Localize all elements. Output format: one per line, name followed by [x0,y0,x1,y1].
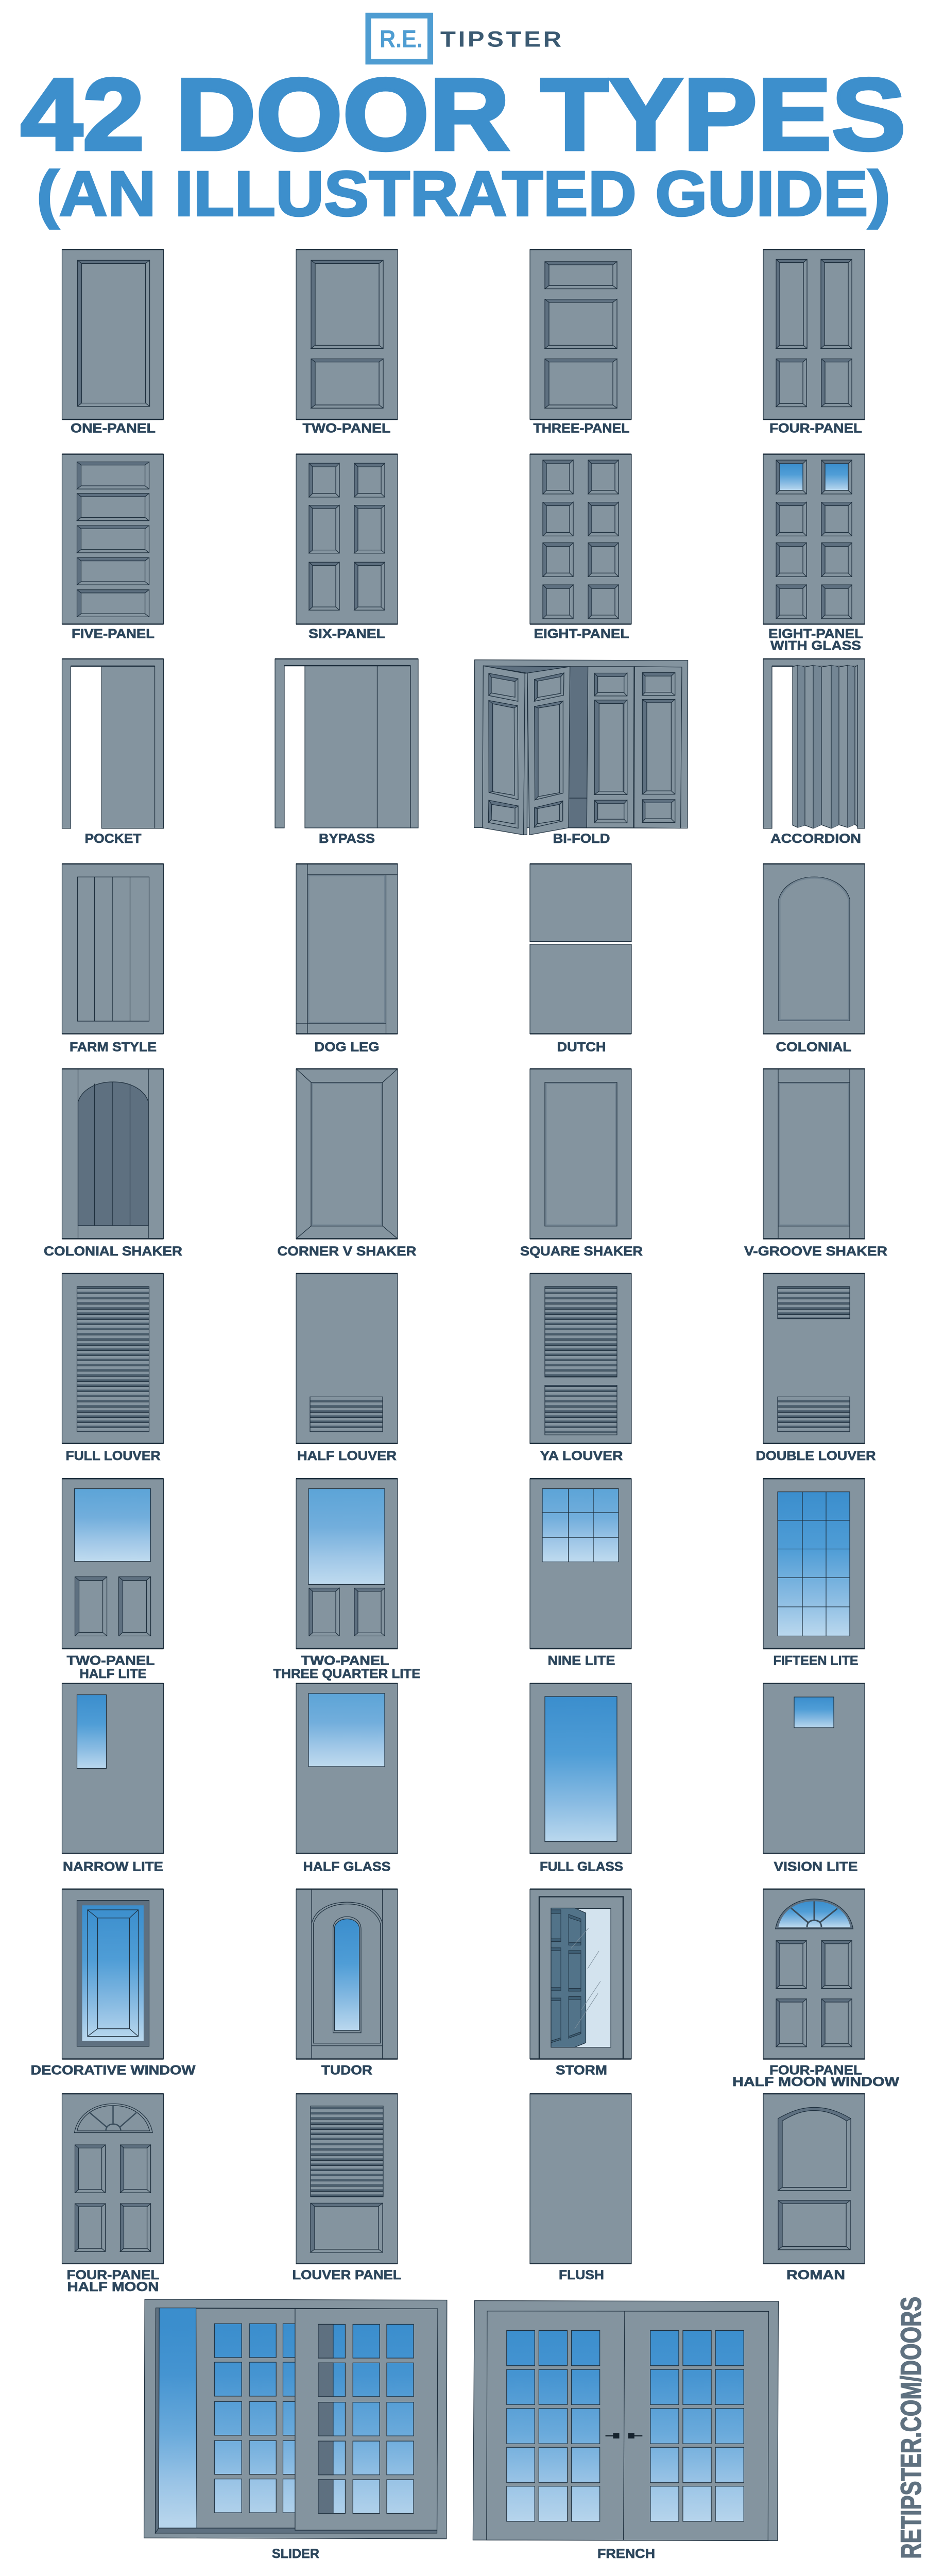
illustration [763,1069,865,1239]
illustration [296,1069,398,1239]
label: ACCORDION [770,831,861,846]
label: VISION LITE [774,1859,857,1874]
label: DUTCH [557,1039,606,1054]
title [21,58,906,229]
illustration [62,1889,164,2059]
door: narrow lite [62,1684,164,1874]
door: two-panel half lite: HALF LITE [79,1666,146,1681]
label: SIX-PANEL [308,626,385,641]
label: DOG LEG [314,1039,379,1054]
illustration [763,1479,865,1649]
label: SQUARE SHAKER [520,1244,643,1258]
door: full louver [62,1274,164,1463]
illustration [62,659,164,828]
door: flush [530,2094,631,2282]
illustration [296,1889,398,2059]
door: louver panel [292,2094,402,2282]
door: pocket [62,659,164,846]
illustration [530,454,631,624]
illustration [763,454,865,624]
door: half glass [296,1684,398,1874]
door: six-panel [296,454,398,641]
door: fifteen lite [763,1479,865,1668]
door: four-panel half moon window: HALF MOON WINDOW [732,2074,899,2089]
door: dog leg [296,864,398,1054]
label: FOUR-PANEL [769,420,862,435]
label: HALF LOUVER [297,1448,397,1463]
illustration [296,1274,398,1444]
illustration [530,1069,631,1239]
door: two-panel three quarter lite [273,1479,421,1681]
illustration [763,249,865,419]
door: storm [530,1889,631,2077]
door: colonial [763,864,865,1054]
vertical url: RETIPSTER.COM/DOORS [895,2297,927,2559]
logo: R.E. Tipster: TIPSTER [440,26,561,52]
illustration [62,1274,164,1444]
door: ya louver [530,1274,631,1463]
illustration [530,864,631,1034]
door: four-panel half moon [62,2094,164,2294]
illustration [474,660,688,835]
door: dutch [530,864,631,1054]
title: 42 DOOR TYPES [21,58,906,172]
door: nine lite [530,1479,631,1668]
door: v-groove shaker [744,1069,887,1258]
label: FIVE-PANEL [72,626,154,641]
illustration [62,864,164,1034]
label: FRENCH [597,2546,655,2561]
label: FULL GLASS [540,1859,623,1874]
label: THREE-PANEL [534,420,630,435]
label: DECORATIVE WINDOW [31,2062,196,2077]
label: YA LOUVER [540,1448,623,1463]
illustration [530,2094,631,2264]
illustration [296,864,398,1034]
illustration [530,1684,631,1853]
illustration [763,1274,865,1444]
door: eight-panel with glass: WITH GLASS [770,638,861,653]
label: FIFTEEN LITE [774,1653,858,1668]
label: TWO-PANEL [67,1653,155,1668]
door: eight-panel [530,454,631,641]
door: two-panel half lite [62,1479,164,1681]
label: NINE LITE [548,1653,615,1668]
logo: R.E. Tipster [368,15,561,62]
door: full glass [530,1684,631,1874]
label: FULL LOUVER [66,1448,161,1463]
illustration [530,1274,631,1444]
label: DOUBLE LOUVER [756,1448,876,1463]
label: ONE-PANEL [71,420,156,435]
door handles [606,2433,642,2438]
label: CORNER V SHAKER [277,1244,417,1258]
illustration [275,659,418,828]
illustration [530,1889,631,2059]
label: EIGHT-PANEL [534,626,629,641]
illustration [763,2094,865,2264]
illustration [296,1479,398,1649]
door: farm style [62,864,164,1054]
door: tudor [296,1889,398,2077]
label: NARROW LITE [63,1859,163,1874]
door: roman [763,2094,865,2282]
door: four-panel half moon: HALF MOON [67,2279,159,2294]
illustration [62,1479,164,1649]
label: BI-FOLD [553,831,610,846]
door: vision lite [763,1684,865,1874]
door: french [473,2301,778,2561]
door: two-panel three quarter lite: THREE QUARTER LITE [273,1666,421,1681]
label: V-GROOVE SHAKER [744,1244,887,1258]
door: one-panel [62,249,164,435]
label: POCKET [85,831,142,846]
label: STORM [556,2062,607,2077]
label: TUDOR [321,2062,372,2077]
label: LOUVER PANEL [292,2267,401,2282]
illustration [296,1684,398,1853]
door: square shaker [520,1069,643,1258]
door: three-panel [530,249,631,435]
label: HALF GLASS [303,1859,390,1874]
logo: R.E. Tipster: R.E. [380,25,423,53]
door: four-panel half moon window [732,1889,899,2089]
door: slider [144,2299,447,2561]
illustration [62,2094,164,2264]
door: two-panel [296,249,398,435]
label: BYPASS [319,831,375,846]
illustration [62,1069,164,1239]
label: FARM STYLE [70,1039,157,1054]
label: TWO-PANEL [301,1653,389,1668]
label: FOUR-PANEL [67,2267,159,2282]
door: four-panel [763,249,865,435]
door: five-panel [62,454,164,641]
illustration [763,1684,865,1853]
illustration [763,1889,865,2059]
door: bypass [275,659,418,846]
door: colonial shaker [44,1069,182,1258]
door: decorative window [31,1889,196,2077]
door: double louver [756,1274,876,1463]
label: FOUR-PANEL [769,2062,862,2077]
illustration [296,249,398,419]
label: EIGHT-PANEL [768,626,863,641]
label: COLONIAL SHAKER [44,1244,182,1258]
label: SLIDER [272,2546,319,2561]
door: eight-panel with glass [763,454,865,653]
illustration [763,864,865,1034]
illustration [62,249,164,419]
label: ROMAN [786,2267,845,2282]
illustration [296,454,398,624]
label: COLONIAL [776,1039,852,1054]
illustration [296,2094,398,2264]
door: bi-fold [474,660,688,846]
door: accordion [763,659,865,846]
illustration [763,659,865,828]
illustration [144,2299,447,2539]
door: corner v shaker [277,1069,417,1258]
label: FLUSH [559,2267,604,2282]
illustration [530,249,631,419]
door: half louver [296,1274,398,1463]
label: TWO-PANEL [303,420,391,435]
illustration [62,454,164,624]
illustration [530,1479,631,1649]
illustration [62,1684,164,1853]
illustration [473,2301,778,2540]
